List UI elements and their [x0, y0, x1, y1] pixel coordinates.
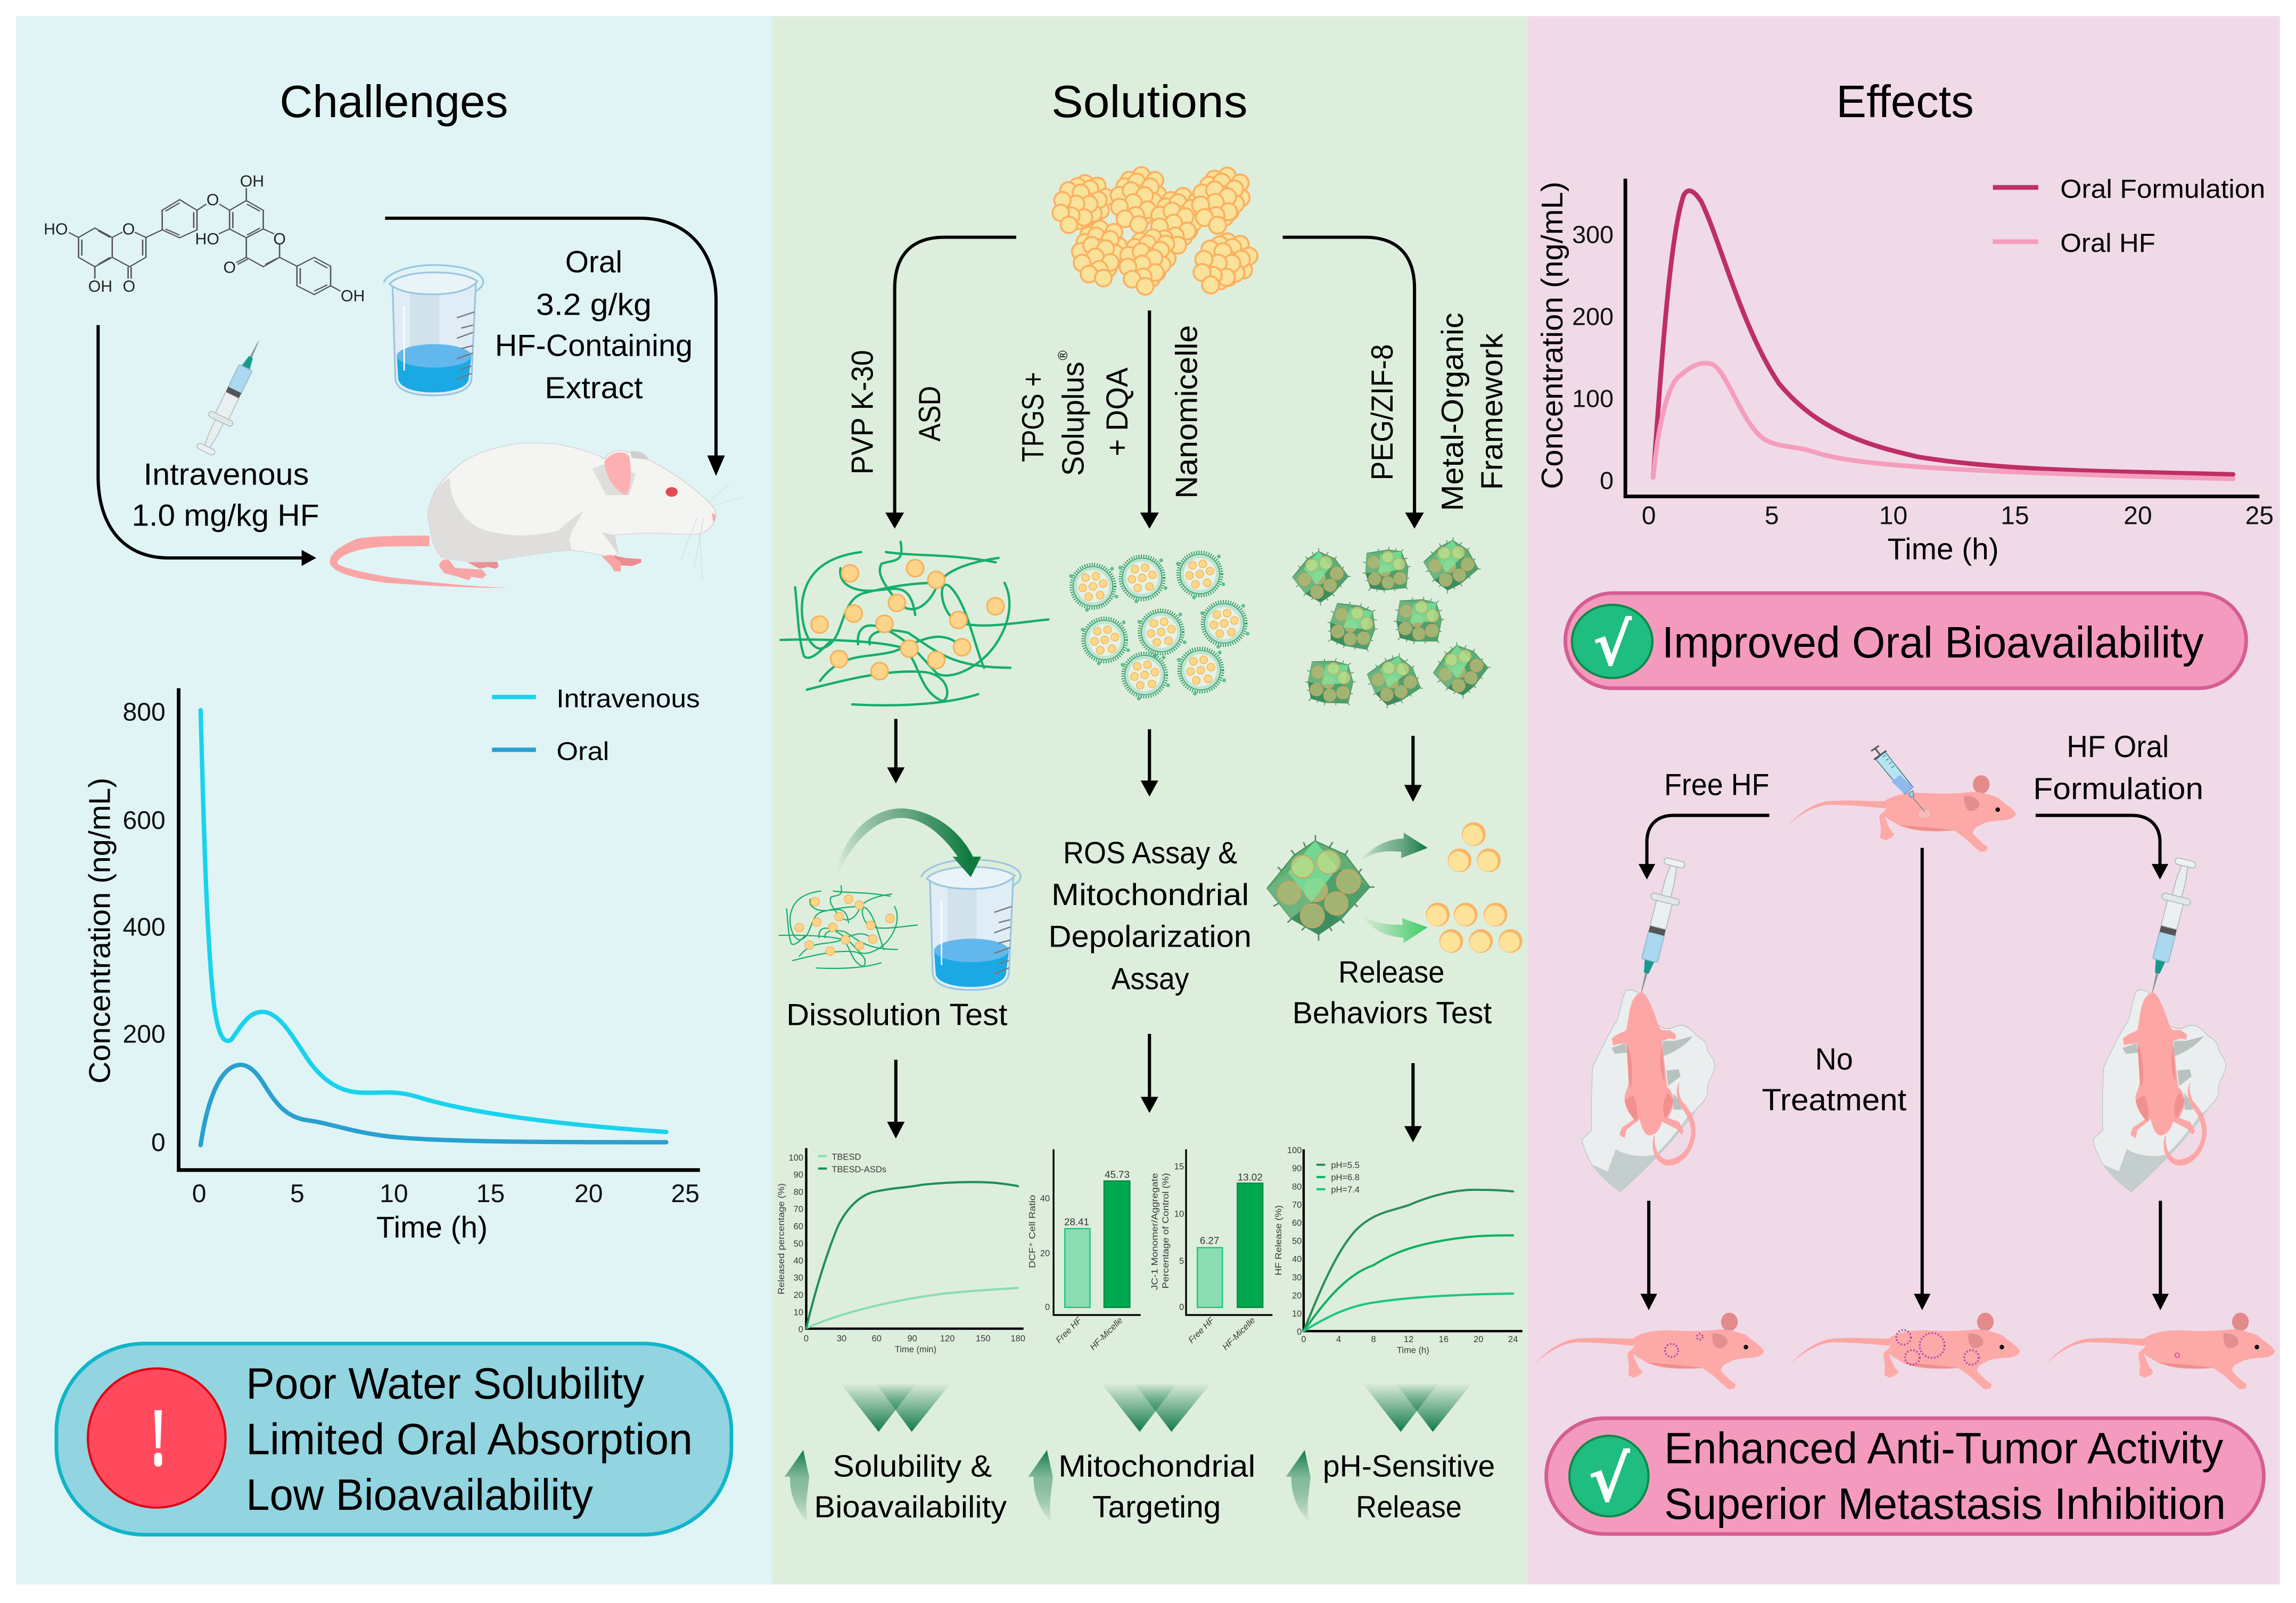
text: oral dose: Extract: [545, 371, 643, 405]
curve: oral HF: [1653, 363, 2233, 479]
text: no treatment: Treatment: [1762, 1083, 1906, 1117]
y tick labels: 40: [1292, 1255, 1302, 1264]
callout: improved oral bioavailability: [1565, 593, 2246, 688]
curve: pH 6.8: [1304, 1235, 1513, 1331]
x tick labels: 0: [1301, 1335, 1306, 1344]
text: anti-tumor results: Superior Metastasis Inhibition: [1664, 1479, 2226, 1528]
x tick labels: 30: [837, 1334, 846, 1344]
y tick labels: [788, 1153, 803, 1335]
x tick labels: 60: [872, 1334, 882, 1344]
molecule atom labels: [44, 173, 365, 305]
legend: [1316, 1161, 1360, 1195]
icon: syringe intravenous: [193, 335, 270, 457]
y axis title: [1150, 1173, 1171, 1290]
x tick labels: 4: [1336, 1335, 1341, 1344]
x tick labels: 8: [1371, 1335, 1376, 1344]
value labels: 13.02: [1238, 1172, 1263, 1183]
bar: free HF: [1197, 1248, 1222, 1308]
label: Framework: Framework: [1475, 333, 1509, 490]
value labels: 45.73: [1105, 1169, 1130, 1180]
icon: outcome mouse, no treatment: [1791, 1313, 2020, 1390]
arrow: intravenous route: [98, 325, 316, 566]
callout: anti-tumor results: [1546, 1418, 2264, 1534]
bar: HF-micelle: [1237, 1183, 1263, 1308]
molecule atom labels: HO: [44, 221, 68, 239]
legend: TBESD-ASDs: [832, 1165, 886, 1174]
y axis tick labels: 0: [151, 1128, 166, 1157]
y axis title: JC-1 Monomer/Aggregate: [1150, 1173, 1159, 1290]
legend: Intravenous: [556, 685, 700, 713]
icon: up arrow mitochondrial: [1028, 1450, 1053, 1523]
x tick labels: 5: [1765, 502, 1779, 530]
y axis tick labels: [123, 697, 166, 1157]
curve: TBESD: [807, 1288, 1018, 1328]
icon: up arrow solubility: [785, 1450, 809, 1523]
panel: solutions background: [772, 16, 1528, 1584]
arrow: formulation outcome: [2152, 1201, 2169, 1310]
icon: tumor-bearing mouse with injection: [1787, 746, 2016, 852]
y axis title: HF Release (%): [1274, 1205, 1283, 1276]
icon: nanomicelles: [1069, 552, 1249, 701]
chart: oral formulation vs oral HF: [1535, 174, 2274, 566]
y tick labels: 90: [1292, 1164, 1302, 1173]
text: no treatment: [1762, 1042, 1906, 1117]
legend: pH=6.8: [1331, 1173, 1360, 1182]
arrow: release to chart: [1404, 1063, 1422, 1142]
arrow: ASD to dissolution: [887, 719, 904, 784]
icon: small ASD network: [779, 886, 917, 968]
icon: syringe and handled mouse, formulation: [2093, 856, 2226, 1191]
text: HF oral formulation: [2033, 730, 2203, 806]
icon: check badge: √: [1593, 611, 1632, 679]
curve: pH 5.5: [1304, 1190, 1513, 1331]
x axis title: Time (h): [376, 1210, 488, 1244]
y tick labels: 10: [794, 1308, 803, 1317]
x tick labels: 180: [1010, 1334, 1025, 1344]
x labels: HF-Micelle: [1088, 1316, 1125, 1352]
icon: hinokiflavone molecule: [44, 173, 365, 305]
y tick labels: 5: [1179, 1256, 1184, 1266]
x tick labels: 12: [1404, 1335, 1413, 1344]
y tick labels: 30: [794, 1273, 803, 1283]
text: anti-tumor results: Enhanced Anti-Tumor Activity: [1664, 1424, 2224, 1473]
label: TPGS +: TPGS +: [1016, 372, 1050, 462]
molecule atom labels: O: [123, 278, 135, 295]
molecule atom labels: O: [207, 192, 219, 209]
y axis tick labels: 800: [123, 697, 166, 726]
icon: white rat: [330, 443, 743, 588]
x axis tick labels: 10: [380, 1179, 408, 1208]
text: oral dose: Oral: [565, 245, 622, 280]
chart: DCF cell ratio bars: [1028, 1149, 1141, 1352]
arrow: ROS to charts: [1141, 1034, 1158, 1113]
icon: beaker oral extract: [384, 265, 483, 396]
molecule atom labels: OH: [341, 287, 365, 305]
icon: check badge: √: [1588, 1442, 1631, 1516]
text: oral dose: HF-Containing: [495, 328, 693, 363]
x tick labels: 150: [976, 1334, 991, 1344]
y tick labels: 20: [794, 1290, 803, 1300]
icon: MOF particles: [1291, 533, 1493, 724]
x tick labels: 0: [1642, 502, 1656, 530]
icon: down triangles solubility: [840, 1383, 951, 1432]
value labels: 28.41: [1064, 1216, 1089, 1228]
legend: Oral HF: [2060, 228, 2155, 258]
label: ASD: ASD: [913, 386, 947, 441]
y tick labels: 100: [1287, 1146, 1302, 1155]
y tick labels: 300: [1572, 221, 1614, 249]
molecule atom labels: HO: [195, 231, 219, 248]
text: oral dose: 3.2 g/kg: [536, 287, 652, 322]
icon: outcome mouse, free HF: [1535, 1313, 1764, 1390]
text: ROS assay: Depolarization: [1048, 919, 1252, 953]
y tick labels: 30: [1292, 1273, 1302, 1283]
y axis title: Percentage of Control (%): [1161, 1173, 1171, 1289]
icon: beaker dissolution: [921, 860, 1021, 990]
legend: pH=7.4: [1331, 1185, 1360, 1195]
text: improved oral bioavailability: Improved Oral Bioavailability: [1662, 618, 2204, 667]
y tick labels: [1287, 1146, 1302, 1337]
panel: effects background: [1528, 16, 2280, 1584]
y tick labels: 80: [1292, 1182, 1302, 1191]
icon: HF nanocrystal clusters: [1047, 161, 1262, 303]
legend: [818, 1152, 886, 1174]
value labels: [1064, 1169, 1130, 1228]
arrow: release high: [1359, 833, 1428, 861]
x tick labels: 20: [2124, 502, 2152, 530]
text: solubility and bioavailability: Bioavailability: [814, 1490, 1007, 1524]
arrow: formulation branch: [2036, 816, 2168, 879]
y tick labels: 20: [1040, 1248, 1050, 1258]
x tick labels: [1301, 1335, 1518, 1344]
text: ROS assay: Assay: [1112, 962, 1189, 996]
molecule atom labels: O: [122, 221, 135, 239]
text: mitochondrial targeting: Mitochondrial: [1058, 1450, 1255, 1484]
legend: Oral Formulation: [2060, 174, 2265, 203]
icon: released HF spheres: [1426, 822, 1523, 953]
x tick labels: [804, 1334, 1025, 1344]
x labels: Free HF: [1187, 1316, 1216, 1345]
text: solubility and bioavailability: [814, 1450, 1007, 1524]
x tick labels: 90: [907, 1334, 917, 1344]
text: free HF: Free HF: [1664, 768, 1770, 802]
value labels: [1200, 1172, 1263, 1246]
value labels: 6.27: [1200, 1235, 1219, 1246]
x axis tick labels: 15: [476, 1179, 505, 1208]
heading: Effects: Effects: [1836, 77, 1974, 127]
text: challenges list: Low Bioavailability: [246, 1470, 594, 1519]
y tick labels: 10: [1174, 1209, 1184, 1219]
text: pH-sensitive release: [1323, 1450, 1495, 1524]
y tick labels: 50: [1292, 1237, 1302, 1246]
y tick labels: 70: [1292, 1200, 1302, 1210]
arrow: oral route: [385, 218, 725, 476]
x tick labels: 25: [2245, 502, 2274, 530]
heading: Challenges: Challenges: [279, 77, 508, 127]
x axis tick labels: 5: [290, 1179, 305, 1208]
x axis title: Time (h): [1397, 1346, 1429, 1355]
molecule atom labels: OH: [240, 173, 264, 191]
panel: challenges background: [16, 16, 772, 1584]
legend: Oral: [556, 737, 609, 766]
x axis tick labels: 20: [574, 1179, 603, 1208]
x axis title: Time (min): [895, 1345, 936, 1354]
icon: check badge: [1569, 1436, 1649, 1516]
y tick labels: 60: [1292, 1219, 1302, 1228]
bar: free HF: [1065, 1229, 1090, 1308]
label: PVP K-30: PVP K-30: [845, 350, 879, 474]
x tick labels: 15: [2001, 502, 2029, 530]
x labels: [1187, 1316, 1257, 1352]
y axis tick labels: 400: [123, 913, 166, 942]
y axis title: Concentration (ng/mL): [1535, 182, 1569, 489]
x axis tick labels: 25: [671, 1179, 700, 1208]
x tick labels: [1642, 502, 2274, 530]
y tick labels: 0: [1045, 1302, 1050, 1312]
x labels: Free HF: [1054, 1316, 1084, 1345]
label: Soluplus: Soluplus: [1056, 361, 1090, 476]
y tick labels: [1040, 1194, 1050, 1312]
icon: outcome mouse, formulation: [2046, 1313, 2275, 1390]
label: Nanomicelle: Nanomicelle: [1170, 325, 1204, 499]
curve: TBESD-ASDs: [807, 1182, 1018, 1328]
text: challenges list: Poor Water Solubility: [246, 1359, 645, 1408]
label: PEG/ZIF-8: PEG/ZIF-8: [1365, 344, 1400, 480]
x axis tick labels: 0: [192, 1179, 206, 1208]
text: release behaviors test: Behaviors Test: [1293, 996, 1492, 1030]
curve: oral: [201, 1065, 666, 1145]
curve: oral formulation: [1653, 191, 2233, 478]
molecule atom labels: O: [224, 259, 236, 276]
arrow: curved dissolution arrow: [835, 808, 981, 878]
label: Metal-Organic: Metal-Organic: [1436, 313, 1470, 511]
y axis title: Concentration (ng/mL): [83, 778, 116, 1083]
text: ROS assay: ROS Assay &: [1063, 836, 1237, 870]
y axis tick labels: 600: [123, 806, 166, 835]
text: oral dose: [495, 245, 693, 405]
y tick labels: [1174, 1162, 1184, 1312]
legend: pH=5.5: [1331, 1161, 1360, 1170]
y axis title: Released percentage (%): [777, 1183, 786, 1295]
y tick labels: 15: [1174, 1162, 1184, 1172]
y tick labels: 0: [1179, 1302, 1184, 1312]
x axis title: Time (h): [1888, 532, 1999, 566]
y tick labels: 50: [794, 1239, 803, 1248]
x axis tick labels: [192, 1179, 700, 1208]
legend: [1993, 174, 2265, 258]
text: intravenous dose: 1.0 mg/kg HF: [132, 498, 319, 532]
icon: up arrow pH: [1286, 1450, 1311, 1523]
y tick labels: 40: [794, 1256, 803, 1266]
y tick labels: 60: [794, 1222, 803, 1231]
chart: dissolution curves: [777, 1148, 1025, 1354]
heading: Solutions: Solutions: [1051, 77, 1248, 127]
text: HF oral formulation: HF Oral: [2067, 730, 2169, 764]
icon: check badge: [1572, 605, 1652, 679]
icon: down triangles pH: [1362, 1383, 1472, 1432]
arrow: dissolution to chart: [887, 1060, 904, 1139]
text: solubility and bioavailability: Solubility &: [833, 1450, 992, 1484]
arrow: free HF outcome: [1641, 1201, 1657, 1310]
legend: TBESD: [832, 1152, 861, 1162]
icon: large MOF: [1267, 835, 1375, 941]
curve: intravenous: [201, 710, 666, 1132]
x tick labels: 24: [1508, 1335, 1518, 1344]
chart: JC-1 ratio bars: [1150, 1149, 1272, 1352]
text: release behaviors test: [1293, 956, 1492, 1030]
icon: syringe and handled mouse, free HF: [1582, 856, 1715, 1191]
x tick labels: 20: [1474, 1335, 1483, 1344]
arrow: to MOF: [1283, 237, 1424, 529]
text: release behaviors test: Release: [1338, 956, 1445, 990]
callout: challenges summary: [56, 1344, 731, 1535]
text: dissolution test: Dissolution Test: [786, 998, 1007, 1032]
bar: HF-micelle: [1104, 1181, 1130, 1308]
y tick labels: 40: [1040, 1194, 1050, 1203]
icon: warning circle: [88, 1368, 226, 1508]
icon: ASD polymer network: [780, 542, 1048, 705]
arrow: to nanomicelle: [1140, 310, 1159, 529]
text: intravenous dose: Intravenous: [144, 457, 309, 491]
x tick labels: 0: [804, 1334, 809, 1344]
chart: pH release curves: [1274, 1146, 1523, 1355]
text: no treatment: No: [1815, 1042, 1853, 1076]
curve: pH 7.4: [1304, 1294, 1513, 1331]
text: pH-sensitive release: pH-Sensitive: [1323, 1450, 1495, 1484]
y tick labels: 0: [1600, 467, 1614, 495]
arrow: MOF to release test: [1404, 736, 1422, 802]
y tick labels: 200: [1572, 303, 1614, 331]
arrow: to ASD: [885, 237, 1016, 529]
y axis tick labels: 200: [123, 1020, 166, 1048]
legend: [492, 685, 700, 766]
text: pH-sensitive release: Release: [1356, 1490, 1462, 1524]
arrow: micelle to ROS assay: [1141, 729, 1158, 796]
y tick labels: 10: [1292, 1309, 1302, 1319]
text: mitochondrial targeting: [1058, 1450, 1255, 1524]
arrow: free HF branch: [1639, 816, 1770, 879]
text: ROS assay: [1048, 836, 1252, 996]
molecule atom labels: OH: [88, 278, 112, 295]
x tick labels: 120: [940, 1334, 954, 1344]
text: HF oral formulation: Formulation: [2033, 772, 2203, 806]
y tick labels: [1572, 221, 1614, 495]
text: intravenous dose: [132, 457, 319, 532]
y tick labels: 100: [1572, 385, 1614, 413]
y tick labels: 70: [794, 1205, 803, 1214]
x labels: HF-Micelle: [1221, 1316, 1257, 1352]
y tick labels: 90: [794, 1170, 803, 1180]
arrow: release low: [1361, 915, 1428, 943]
x tick labels: 16: [1439, 1335, 1449, 1344]
text: challenges list: Limited Oral Absorption: [246, 1415, 693, 1464]
molecule atom labels: O: [273, 231, 286, 248]
y tick labels: 20: [1292, 1291, 1302, 1301]
arrow: no treatment branch: [1914, 848, 1930, 1310]
y tick labels: 0: [1297, 1327, 1302, 1337]
text: mitochondrial targeting: Targeting: [1092, 1490, 1221, 1524]
icon: down triangles mitochondrial: [1101, 1383, 1211, 1432]
x tick labels: 10: [1879, 502, 1907, 530]
text: anti-tumor results: [1664, 1424, 2226, 1528]
text: challenges list: [246, 1359, 693, 1519]
y tick labels: 80: [794, 1188, 803, 1197]
label: Soluplus: ®: [1056, 350, 1071, 360]
label: + DQA: + DQA: [1100, 367, 1134, 456]
y tick labels: 0: [799, 1325, 803, 1335]
text: ROS assay: Mitochondrial: [1051, 878, 1249, 912]
y tick labels: 100: [788, 1153, 803, 1163]
chart: IV vs oral concentration: [83, 685, 700, 1244]
y axis title: DCF⁺ Cell Ratio: [1028, 1195, 1038, 1268]
x labels: [1054, 1316, 1125, 1352]
